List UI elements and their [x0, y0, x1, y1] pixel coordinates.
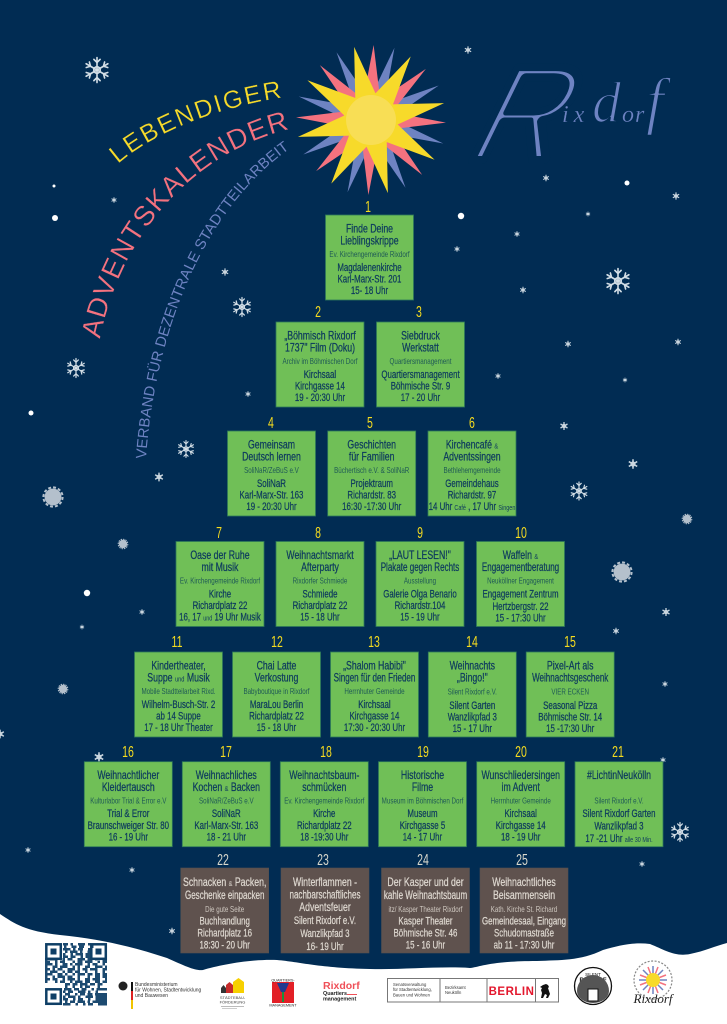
subtitle: Verband: VERBAND FÜR DEZENTRALE STADTTEILARBEIT [136, 140, 286, 458]
logo: Berlin Senate and Neukölln: Bauen und Wohnen [393, 992, 431, 998]
logo: Silent Rixdorf: SILENT [585, 972, 601, 977]
day 17: SoliNaR [212, 808, 241, 821]
day 23: Adventsfeuer [299, 902, 351, 914]
day 7: Oase der Ruhe [190, 550, 250, 562]
logo: Silent Rixdorf [574, 968, 612, 1004]
day 2 [276, 322, 364, 407]
logo: Städtebauförderung [220, 978, 246, 1009]
day numbers: 23 [317, 851, 329, 869]
day 15: VIER ECKEN [551, 688, 589, 697]
day numbers: 9 [417, 524, 423, 542]
day numbers: 24 [417, 851, 429, 869]
day 12: Richardplatz 22 [249, 710, 304, 723]
day 1: Lieblingskrippe [340, 235, 399, 248]
day 25: Schudomastraße [494, 927, 554, 940]
day 19: 14 - 17 Uhr [403, 832, 442, 844]
day 7: Kirche [209, 588, 231, 601]
day 24: Kasper Theater [398, 915, 453, 928]
day 6: 14 Uhr Café , 17 Uhr Singen [429, 501, 516, 513]
logo: Bundesministerium: Bundesministerium [135, 982, 178, 988]
day 22: 18:30 - 20 Uhr [200, 939, 250, 952]
day 12: Verkostung [255, 672, 299, 685]
logo: Quartiersmanagement emblem: QUARTIERS- [271, 978, 295, 982]
logo: Städtebauförderung: STÄDTEBAU- [220, 995, 246, 1000]
logo: Rixdorf Quartiersmanagement: management [323, 996, 356, 1002]
day 8: Richardplatz 22 [293, 600, 347, 612]
day numbers: 8 [315, 524, 321, 542]
day numbers: 11 [172, 633, 182, 651]
day 7: mit Musik [202, 562, 239, 574]
day 3: Quartiersmanagement [390, 357, 451, 366]
logo: Berlin Senate and Neukölln: Neukölln [445, 990, 462, 995]
day 10: 15 - 17:30 Uhr [495, 612, 546, 625]
day numbers: 19 [417, 743, 429, 761]
day 19: Kirchgasse 5 [400, 820, 445, 833]
day 19: Historische [401, 770, 444, 783]
day 12: Chai Latte [257, 660, 297, 673]
day 8: 15 - 18 Uhr [300, 611, 340, 624]
day 21 [575, 762, 663, 847]
day 20: 18 - 19 Uhr [501, 832, 540, 844]
day 13: Kirchsaal [358, 699, 391, 711]
day 11: 17 - 18 Uhr Theater [144, 722, 213, 734]
day 5: Projektraum [350, 478, 393, 490]
day 23: 16- 19 Uhr [306, 941, 344, 953]
day 1: Ev. Kirchengemeinde Rixdorf [329, 250, 410, 259]
day 18: 18 -19:30 Uhr [300, 832, 348, 844]
star [295, 44, 447, 196]
day 7: Richardplatz 22 [193, 600, 247, 612]
day 6: Bethlehemgemeinde [443, 466, 501, 475]
logo: Rixdorf Quartiersmanagement: Rixdorf [323, 980, 360, 992]
day 17: 18 - 21 Uhr [207, 832, 246, 844]
day 3 [376, 322, 464, 407]
logo: Silent Rixdorf: RIXDORF [580, 978, 607, 984]
day 24: 15 - 16 Uhr [406, 939, 445, 952]
day 4: Karl-Marx-Str. 163 [240, 489, 303, 502]
day 23: Winterflammen - [293, 877, 357, 889]
day 20: Kirchgasse 14 [496, 820, 546, 833]
day 8: Afterparty [301, 562, 340, 574]
day 3: Quartiersmanagement [381, 369, 460, 381]
day 20: Herrnhuter Gemeinde [491, 797, 551, 806]
day 19: Museum im Böhmischen Dorf [382, 797, 463, 806]
day numbers: 3 [416, 303, 422, 321]
day 18: Kirche [313, 808, 335, 821]
day 9: Richardstr.104 [395, 600, 445, 612]
day 4: Gemeinsam [248, 439, 295, 452]
logo: Verband star: Rixdorf [632, 991, 675, 1006]
day 14 [428, 652, 516, 737]
day 10: Neuköllner Engagement [487, 577, 554, 586]
day 6: Kirchencafé & [446, 439, 499, 452]
script wordmark: Rixdorf: f [646, 65, 672, 136]
day 15: Böhmische Str. 14 [538, 711, 602, 724]
day numbers: 17 [220, 743, 232, 761]
day 10: Waffeln & [503, 550, 539, 562]
day 2: 19 - 20:30 Uhr [295, 392, 345, 404]
day 22: Die gute Seite [205, 905, 244, 914]
day numbers: 21 [612, 743, 624, 761]
day 14: Wanzlikpfad 3 [448, 711, 497, 724]
logo: Bundesministerium [118, 982, 202, 1009]
day 2: Kirchsaal [304, 369, 336, 381]
day 18: schmücken [302, 782, 347, 795]
day 20: Kirchsaal [505, 808, 537, 821]
logo: Berlin Senate and Neukölln: Senatsverwaltung [393, 982, 427, 987]
day 22: Geschenke einpacken [185, 890, 264, 902]
day 16 [84, 762, 172, 847]
script wordmark: Rixdorf: ix [562, 102, 589, 128]
day 24: kahle Weihnachtsbaum [384, 890, 467, 902]
day 12: 15 - 18 Uhr [257, 722, 296, 734]
day 9: Ausstellung [404, 577, 436, 586]
day 3: Werkstatt [402, 342, 439, 355]
day numbers: 18 [320, 743, 332, 761]
day 9: Galerie Olga Benario [383, 588, 457, 601]
day 17: SoliNaR/ZeBuS e.V [199, 797, 254, 806]
day 13: „Shalom Habibi" [343, 660, 406, 673]
logo: Quartiersmanagement emblem: MANAGEMENT [269, 1004, 297, 1008]
logo: Berlin Senate and Neukölln: für Stadtentwicklung, [393, 987, 432, 992]
day numbers: 10 [515, 524, 527, 542]
day 24: Böhmische Str. 46 [394, 927, 457, 940]
day numbers: 25 [516, 851, 528, 869]
day numbers: 5 [367, 414, 373, 432]
day numbers: 22 [217, 851, 229, 869]
day 20: im Advent [502, 782, 540, 795]
day numbers: 20 [515, 743, 527, 761]
day 22: Buchhandlung [200, 915, 250, 928]
day 5: Geschichten [347, 439, 396, 452]
day 8: Schmiede [303, 588, 337, 601]
day 15: Seasonal Pizza [543, 700, 598, 712]
day 12: MaraLou Berlin [250, 699, 303, 711]
logo: Berlin Senate and Neukölln [388, 978, 558, 1002]
day numbers: 6 [469, 414, 475, 432]
day numbers: 14 [466, 633, 478, 651]
day 17: Weihnachliches [196, 770, 257, 783]
day 15: Weihnachtsgeschenk [532, 672, 608, 685]
day 16: 16 - 19 Uhr [109, 832, 148, 844]
day 4: SoliNaR/ZeBuS e.V [244, 466, 299, 475]
script wordmark: Rixdorf: R [448, 39, 611, 189]
day 4: 19 - 20:30 Uhr [246, 501, 297, 513]
day 24 [382, 868, 470, 953]
day 13: Kirchgasse 14 [350, 710, 399, 723]
day 23: Silent Rixdorf e.V. [294, 915, 356, 927]
day 3: Böhmische Str. 9 [391, 380, 450, 393]
day 5 [328, 431, 416, 516]
day 8: Weihnachtsmarkt [286, 550, 354, 562]
title: Lebendiger: LEBENDIGER [108, 82, 281, 163]
day 8 [276, 542, 364, 626]
logo: Verband star [632, 961, 675, 1006]
day 2: Kirchgasse 14 [295, 380, 345, 393]
day 13: Herrnhuter Gemeinde [344, 687, 405, 696]
logo: Städtebauförderung: FÖRDERUNG [220, 1000, 245, 1004]
day 19: Museum [407, 808, 438, 821]
day 2: Archiv im Böhmischen Dorf [282, 357, 358, 366]
day 6: Gemeindehaus [445, 478, 499, 490]
day 23: Wanzlikpfad 3 [300, 928, 350, 940]
script wordmark: Rixdorf: d [592, 70, 622, 135]
day 6 [428, 431, 516, 516]
day 1: Karl-Marx-Str. 201 [338, 273, 401, 286]
day 16: Weihnachtlicher [97, 770, 160, 783]
day 9: „LAUT LESEN!" [389, 550, 451, 562]
day 13: Singen für den Frieden [334, 672, 415, 685]
day 9 [376, 542, 464, 626]
day 15 [526, 652, 614, 737]
day 16: Kulturlabor Trial & Error e.V [90, 797, 167, 806]
day 11: Kindertheater, [151, 660, 206, 673]
day 12 [232, 652, 320, 737]
day 6: Adventssingen [443, 451, 501, 464]
day numbers: 16 [122, 743, 134, 761]
title: Adventskalender: ADVENTSKALENDER [82, 112, 288, 339]
day numbers: 15 [564, 633, 576, 651]
day 4: SoliNaR [257, 478, 286, 490]
day 25: Weihnachtliches [492, 877, 556, 889]
day 18 [280, 762, 368, 847]
day numbers [122, 198, 624, 869]
day 14: Weihnachts [450, 660, 495, 673]
day 7: Ev. Kirchengemeinde Rixdorf [180, 577, 260, 586]
day 25 [480, 868, 568, 953]
day 5: für Familien [349, 451, 395, 464]
day 8: Rixdorfer Schmiede [293, 577, 347, 586]
day 22: Richardplatz 16 [197, 927, 252, 940]
day 7: 16, 17 und 19 Uhr Musik [179, 611, 261, 624]
day 19: Filme [412, 782, 433, 795]
day 22: Schnacken & Packen, [183, 877, 266, 889]
day 7 [176, 542, 264, 626]
day 9: Plakate gegen Rechts [381, 562, 459, 574]
day 11: Suppe und Musik [147, 672, 210, 685]
day 20: Wunschliedersingen [481, 770, 560, 783]
logo: Rixdorf Quartiersmanagement: Quartiers [323, 991, 347, 997]
day 18: Ev. Kirchengemeinde Rixdorf [284, 797, 364, 806]
day 17 [182, 762, 270, 847]
day 10: Hertzbergstr. 22 [493, 601, 548, 613]
day 16: Kleidertausch [102, 782, 155, 795]
day 25: ab 11 - 17:30 Uhr [494, 939, 554, 952]
day 14: Silent Garten [449, 700, 495, 712]
day 21: #LichtinNeukölln [587, 770, 651, 783]
day 19 [378, 762, 466, 847]
day numbers: 7 [216, 524, 222, 542]
day 1 [326, 215, 414, 300]
day 10 [476, 542, 564, 626]
day 20 [477, 762, 565, 847]
day 23 [281, 868, 369, 953]
day 4: Deutsch lernen [242, 451, 301, 464]
script wordmark: Rixdorf: or [622, 102, 645, 128]
day 10: Engagementberatung [482, 562, 559, 574]
day numbers: 2 [315, 303, 321, 321]
day numbers: 4 [268, 414, 274, 432]
day numbers: 12 [271, 633, 283, 651]
day 1: Magdalenenkirche [337, 262, 402, 274]
day 15: 15 -17:30 Uhr [546, 723, 594, 735]
QR code [45, 944, 107, 1004]
day 3: 17 - 20 Uhr [401, 392, 440, 404]
logo: Quartiersmanagement emblem [269, 978, 297, 1008]
day 21: Silent Rixdorf Garten [582, 808, 656, 821]
day 24: Der Kasper und der [387, 877, 464, 889]
day 10: Engagement Zentrum [482, 588, 559, 601]
logo: Berlin Senate and Neukölln: BERLIN [489, 986, 534, 998]
day numbers: 1 [365, 198, 371, 216]
day 3: Siebdruck [401, 330, 441, 343]
day 25: Gemeindesaal, Eingang [482, 915, 566, 928]
logo: Bundesministerium: für Wohnen, Stadtentwicklung [135, 988, 202, 994]
day 2: „Böhmisch Rixdorf [284, 330, 356, 343]
day 17: Karl-Marx-Str. 163 [194, 820, 258, 833]
day 21: Wanzlikpfad 3 [594, 821, 644, 833]
day 23: nachbarschaftliches [289, 889, 361, 902]
day 16: Trial & Error [107, 808, 149, 821]
day 1: 15- 18 Uhr [351, 285, 388, 297]
day 13: 17:30 - 20:30 Uhr [344, 722, 405, 734]
day 11: Wilhelm-Busch-Str. 2 [142, 699, 215, 711]
day 6: Richardstr. 97 [448, 489, 496, 502]
logo: Rixdorf Quartiersmanagement [323, 980, 360, 1002]
day numbers: 13 [368, 633, 380, 651]
day 13 [330, 652, 418, 737]
day 18: Richardplatz 22 [297, 820, 352, 833]
day 15: Pixel-Art als [547, 660, 593, 673]
logo: Berlin Senate and Neukölln: Bezirksamt [445, 985, 467, 990]
day 24: itz/ Kasper Theater Rixdorf [389, 905, 462, 914]
day 14: Silent Rixdorf e.V. [448, 688, 497, 697]
day 14: „Bingo!" [457, 672, 488, 685]
day 12: Babyboutique in Rixdorf [243, 687, 310, 696]
day 4 [228, 431, 316, 516]
logo: Bundesministerium: und Bauwesen [135, 993, 168, 999]
day 11 [134, 652, 222, 737]
day 25: Kath. Kirche St. Richard [491, 905, 557, 914]
day 17: Kochen & Backen [193, 782, 260, 795]
day 5: Richardstr. 83 [347, 489, 396, 502]
day 5: 16:30 -17:30 Uhr [342, 501, 401, 513]
day 22 [181, 868, 269, 953]
day 21: Silent Rixdorf e.V. [594, 797, 644, 806]
day 9: 15 - 19 Uhr [400, 611, 440, 624]
day 11: Mobile Stadtteilarbeit Rixd. [141, 687, 216, 696]
day 2: 1737" Film (Doku) [285, 342, 355, 355]
day 25: Beisammensein [493, 890, 555, 902]
day 18: Weihnachtsbaum- [289, 770, 359, 783]
day 5: Büchertisch e.V. & SoliNaR [334, 466, 409, 475]
day 14: 15 - 17 Uhr [453, 723, 492, 735]
snow hill [0, 914, 727, 1024]
day 21: 17 -21 Uhr alle 30 Min. [585, 833, 653, 846]
day 16: Braunschweiger Str. 80 [88, 820, 169, 833]
day 1: Finde Deine [346, 223, 393, 236]
day 11: ab 14 Suppe [156, 710, 201, 723]
